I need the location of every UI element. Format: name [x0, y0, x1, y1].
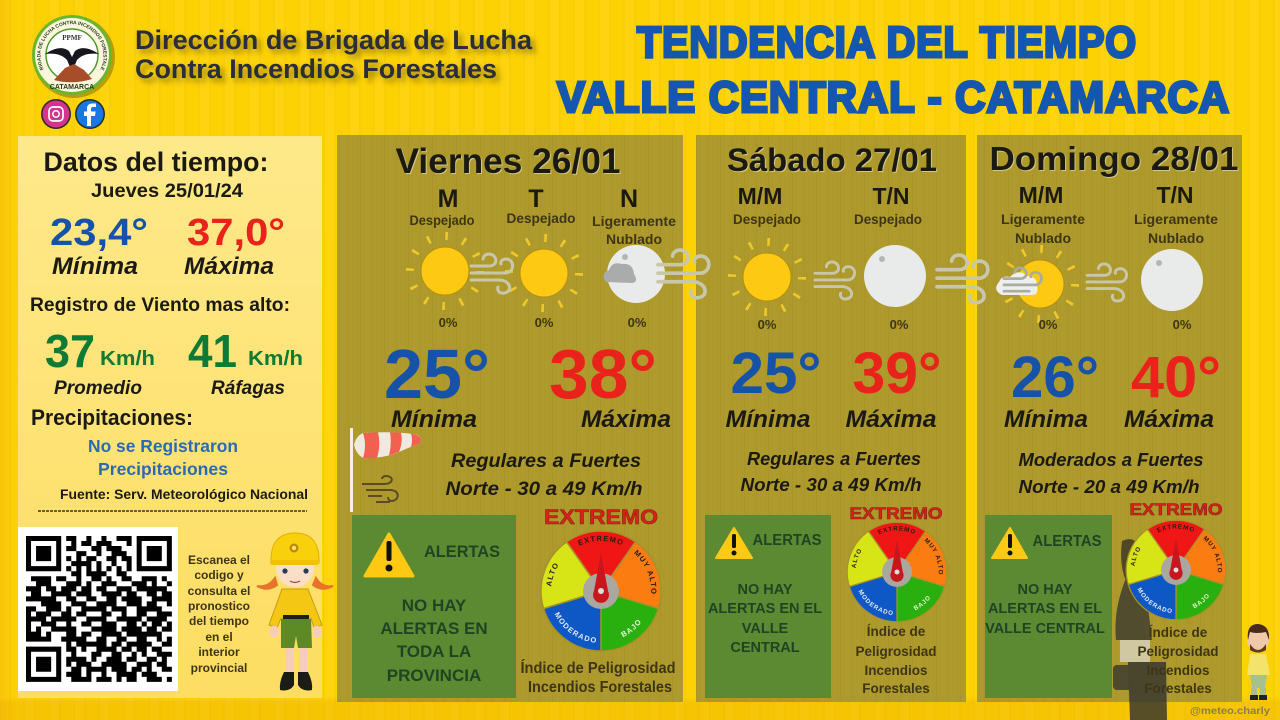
minimum: Mínima [391, 406, 477, 433]
maximum: Máxima [1124, 406, 1214, 433]
title: TENDENCIA DEL TIEMPO [637, 18, 1137, 67]
forecast panel: Sunday background [977, 135, 1242, 702]
precipitation text: Precipitaciones [98, 459, 228, 479]
alert box: VALLE CENTRAL [985, 621, 1105, 637]
QR caption: en el [205, 630, 233, 644]
alert box: ALERTAS [1032, 533, 1102, 550]
gauge caption: Incendios [864, 663, 928, 678]
logo: forest fire brigade badge: CATAMARCA [50, 84, 94, 91]
conditions: Despejado [854, 212, 922, 227]
minimum: 25° [384, 335, 490, 413]
gauge caption: Incendios [1146, 663, 1210, 678]
gauge: fire danger index: MUY ALTO [924, 538, 944, 574]
conditions: Nublado [1015, 231, 1071, 246]
left info panel background [18, 136, 322, 698]
alert box: NO HAY [402, 596, 467, 615]
minimum: Mínima [1004, 406, 1088, 433]
wind heading: Registro de Viento mas alto: [30, 295, 290, 316]
minimum [726, 341, 822, 433]
day heading: Viernes 26/01 [396, 142, 620, 181]
wind forecast: Norte - 30 a 49 Km/h [446, 479, 642, 500]
minimum temperature: Mínima [52, 253, 138, 280]
gauge: fire danger index: BAJO [1192, 594, 1209, 608]
maximum: 38° [549, 335, 657, 413]
gauge: fire danger index: EXTREMO [1156, 524, 1194, 532]
alert box: ALERTAS EN EL [708, 601, 822, 617]
heading: datos del tiempo: Datos del tiempo: [44, 147, 268, 177]
conditions: Ligeramente [592, 214, 677, 229]
QR caption: interior [198, 645, 240, 659]
organisation name [135, 25, 533, 84]
panel: Sunday 28/01 [935, 140, 1238, 720]
average wind: Km/h [100, 348, 155, 370]
gauge: fire danger index: MODERADO [1138, 587, 1172, 613]
alert box: CENTRAL [730, 640, 800, 656]
minimum: 25° [730, 341, 822, 406]
precipitation chance [758, 317, 909, 332]
periods: M/M [738, 183, 782, 209]
periods: T [528, 185, 544, 213]
icon: wind small over cloud [1004, 268, 1041, 291]
illustration: author caricature [1247, 624, 1270, 700]
forecast panel: Saturday background [696, 135, 966, 702]
periods: T/N [872, 183, 910, 209]
maximum: 40° [1131, 345, 1221, 410]
gauge caption: Forestales [1144, 681, 1212, 696]
logo: forest fire brigade badge [32, 15, 115, 98]
icon: wind 2 [658, 250, 709, 298]
icon: moon with cloud [604, 245, 665, 303]
precipitation chance: 0% [439, 315, 458, 330]
minimum temperature [50, 212, 148, 280]
day heading: Sábado 27/01 [727, 142, 937, 178]
icon: windsock [350, 428, 421, 512]
periods: T/N [1156, 182, 1194, 208]
minimum [1004, 345, 1099, 433]
gauge: fire danger index [846, 522, 946, 622]
gauge: fire danger index: MUY ALTO [634, 550, 656, 594]
conditions: Despejado [506, 211, 576, 226]
icon: facebook [75, 99, 105, 129]
precipitation chance [439, 315, 647, 330]
average wind: Promedio [54, 378, 142, 399]
danger level label: EXTREMO [850, 504, 942, 523]
alert box: ALERTAS EN [380, 619, 488, 638]
precipitation chance: 0% [1039, 317, 1058, 332]
alert box: PROVINCIA [387, 666, 481, 685]
alert box: VALLE [742, 621, 789, 637]
maximum temperature: 37,0° [187, 212, 285, 254]
gauge caption [855, 624, 937, 696]
alert box: NO HAY [737, 582, 793, 598]
organisation name: Contra Incendios Forestales [135, 54, 497, 84]
QR caption: provincial [191, 661, 247, 675]
maximum [549, 335, 671, 433]
organisation name: Dirección de Brigada de Lucha [135, 25, 533, 55]
gauge: fire danger index: BAJO [620, 620, 640, 638]
icon: wind over sun [937, 255, 988, 303]
minimum: 26° [1011, 345, 1099, 410]
logo: forest fire brigade badge: PPMF [62, 34, 82, 42]
maximum temperature: Máxima [184, 253, 274, 280]
minimum: Mínima [726, 406, 810, 433]
maximum: Máxima [581, 406, 671, 433]
gauge caption: Incendios Forestales [528, 679, 672, 696]
wind forecast [446, 451, 642, 500]
QR caption: pronostico [188, 599, 250, 613]
icon: sun [732, 242, 802, 312]
QR caption: codigo y [194, 568, 244, 582]
conditions [410, 211, 677, 247]
date: Jueves 25/01/24 [91, 181, 243, 202]
wind forecast: Norte - 30 a 49 Km/h [740, 475, 922, 495]
alert box: ALERTAS [424, 542, 500, 561]
photo silhouette: passer-by [1113, 539, 1167, 720]
conditions: Nublado [1148, 231, 1204, 246]
wind forecast [1018, 450, 1204, 497]
average wind [45, 325, 155, 399]
danger level label: EXTREMO [544, 506, 658, 529]
icon: instagram [41, 99, 71, 129]
precipitation chance: 0% [1173, 317, 1192, 332]
precipitation chance: 0% [535, 315, 554, 330]
maximum: 39° [852, 341, 942, 406]
alert box: NO HAY [1017, 582, 1073, 598]
gauge: fire danger index: BAJO [913, 596, 930, 610]
conditions: Nublado [606, 232, 662, 247]
maximum: Máxima [846, 406, 936, 433]
QR code [18, 527, 178, 691]
precipitation heading: Precipitaciones: [31, 405, 193, 430]
gust wind: Ráfagas [211, 378, 285, 399]
precipitation text: No se Registraron [88, 436, 238, 456]
precipitation chance [1039, 317, 1192, 332]
wind forecast: Regulares a Fuertes [451, 451, 641, 472]
danger level label: EXTREMO [1130, 500, 1222, 519]
average wind: 37 [45, 325, 95, 377]
icon: moon [864, 245, 926, 307]
day heading: Domingo 28/01 [990, 140, 1238, 177]
title [557, 18, 1230, 122]
logo: forest fire brigade badge: BRIGADA DE LUCHA CONTRA INCENDIOS FORESTALES [37, 20, 107, 71]
source: Fuente: Serv. Meteorológico Nacional [60, 487, 308, 502]
gauge caption: Peligrosidad [1137, 644, 1219, 659]
panel: Saturday 27/01 [705, 142, 946, 698]
gauge: fire danger index: MUY ALTO [1203, 536, 1222, 572]
gauge: fire danger index: ALTO [1130, 547, 1140, 566]
panel: Friday 26/01 [350, 142, 711, 698]
gauge: fire danger index: MODERADO [858, 589, 893, 615]
icon: sun with cloud [996, 249, 1075, 319]
QR caption: del tiempo [189, 614, 249, 628]
maximum [846, 341, 942, 433]
gauge: fire danger index [1126, 520, 1226, 620]
conditions: Despejado [410, 213, 474, 228]
alert box: ALERTAS EN EL [988, 601, 1102, 617]
alert box: TODA LA [397, 642, 471, 661]
precipitation chance: 0% [628, 315, 647, 330]
periods: M [438, 185, 458, 213]
icon: moon [1141, 249, 1203, 311]
periods [1019, 182, 1194, 208]
gauge caption [1137, 625, 1219, 696]
gauge caption: Peligrosidad [855, 644, 937, 659]
periods: N [620, 185, 638, 213]
icon: wind brown [362, 476, 398, 502]
title: VALLE CENTRAL - CATAMARCA [557, 73, 1230, 122]
gauge caption [520, 660, 676, 696]
gauge: fire danger index: EXTREMO [578, 536, 623, 546]
gust wind: 41 [188, 325, 237, 377]
icon: wind 1 [471, 254, 513, 293]
gauge: fire danger index: MODERADO [554, 612, 596, 642]
precipitation chance: 0% [758, 317, 777, 332]
gauge caption: Índice de [867, 624, 926, 639]
conditions [733, 212, 922, 227]
illustration: girl ranger [257, 533, 333, 690]
maximum temperature [184, 212, 285, 280]
QR caption: Escanea el [188, 553, 250, 567]
gauge: fire danger index: ALTO [852, 549, 861, 568]
icon: wind [815, 262, 855, 299]
conditions [1001, 212, 1219, 246]
gauge caption: Índice de Peligrosidad [520, 660, 676, 677]
minimum temperature: 23,4° [50, 212, 148, 254]
conditions: Ligeramente [1001, 212, 1086, 227]
alert box [352, 515, 516, 698]
icon: sun morning [410, 236, 480, 306]
alert box [985, 515, 1112, 698]
icon: sun afternoon [509, 238, 579, 308]
alert box: ALERTAS [752, 532, 822, 549]
precipitation text [88, 436, 238, 479]
icon: wind [1087, 264, 1127, 301]
gauge caption: Índice de [1149, 625, 1208, 640]
periods [738, 183, 910, 209]
conditions: Despejado [733, 212, 801, 227]
wind forecast: Norte - 20 a 49 Km/h [1018, 477, 1200, 497]
wind forecast: Regulares a Fuertes [747, 449, 921, 469]
panel: weather data for Thursday [30, 147, 308, 511]
forecast panel: Friday background [337, 135, 683, 702]
alert box [705, 515, 831, 698]
precipitation chance: 0% [890, 317, 909, 332]
gust wind [188, 325, 303, 399]
credit: @meteo.charly [1190, 705, 1270, 717]
gauge: fire danger index [542, 530, 662, 652]
QR caption [188, 553, 250, 675]
periods: M/M [1019, 182, 1063, 208]
maximum [1124, 345, 1221, 433]
gauge: fire danger index: ALTO [546, 564, 558, 586]
gust wind: Km/h [248, 348, 303, 370]
gauge caption: Forestales [862, 681, 930, 696]
wind forecast: Moderados a Fuertes [1018, 450, 1204, 470]
periods [438, 185, 638, 213]
conditions: Ligeramente [1134, 212, 1219, 227]
wind forecast [740, 449, 922, 495]
gauge: fire danger index: EXTREMO [878, 526, 915, 534]
QR caption: consulta el [188, 584, 250, 598]
